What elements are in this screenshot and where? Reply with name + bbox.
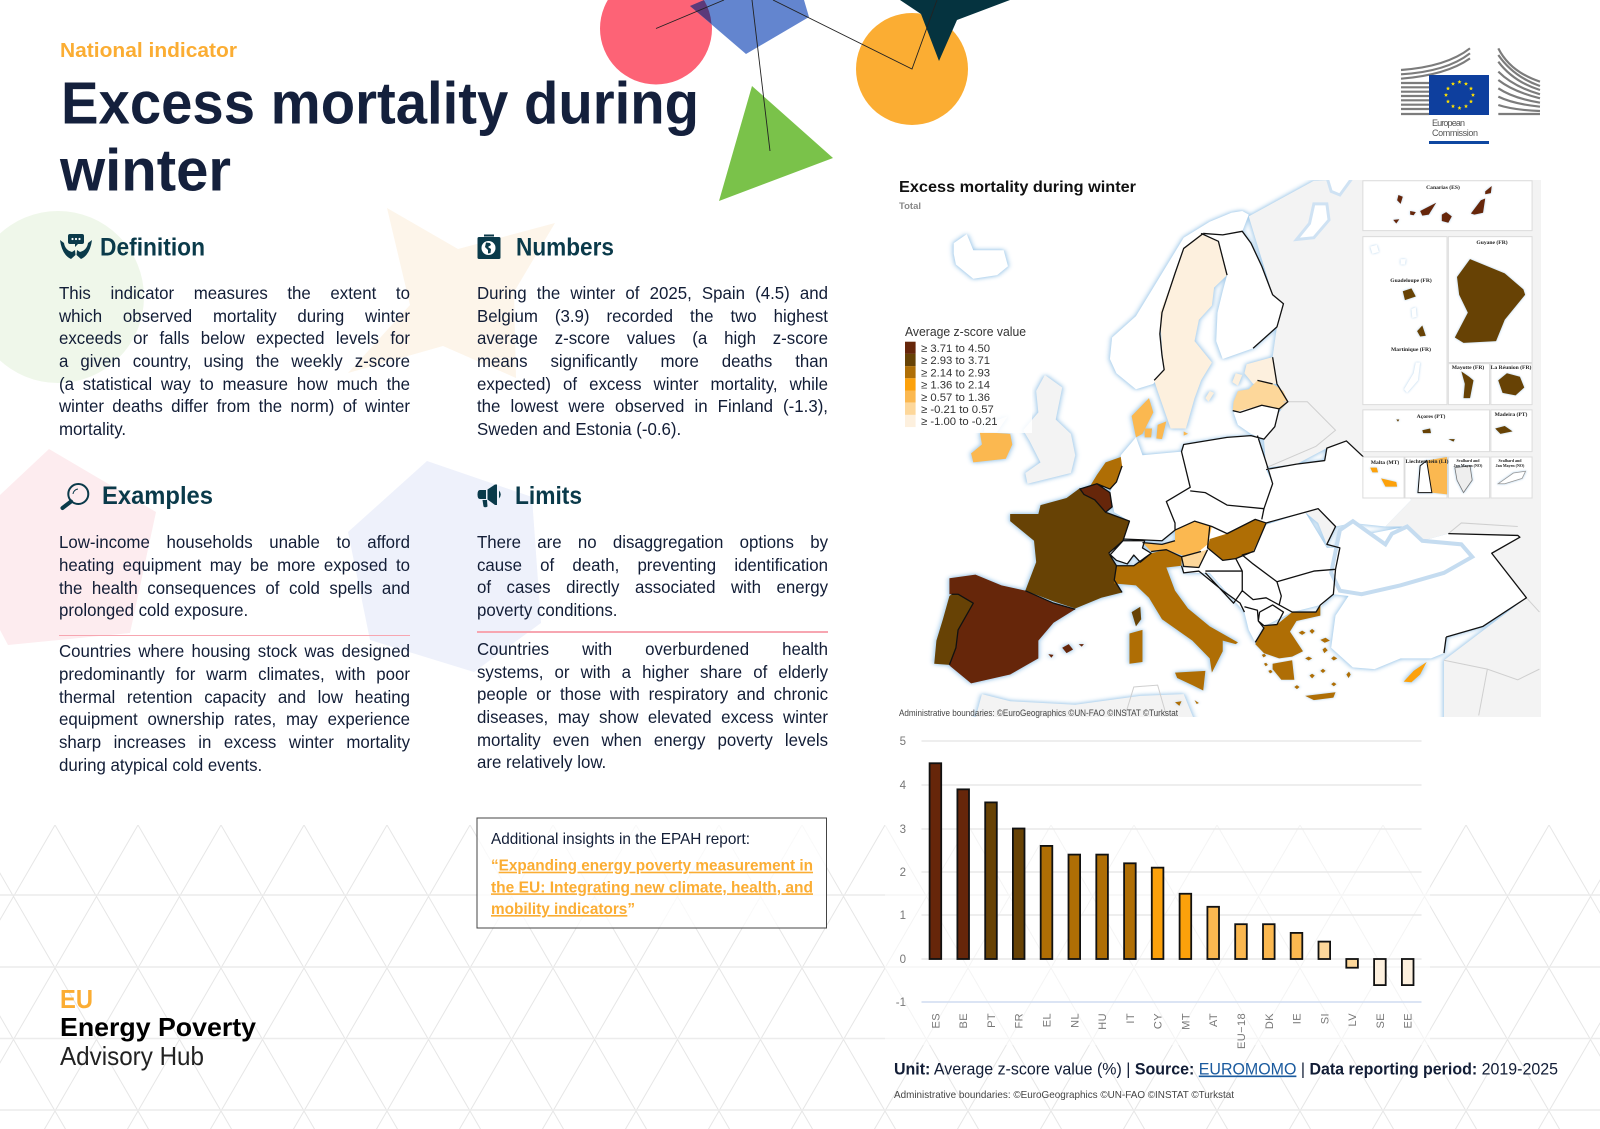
source line: Unit: Average z-score value (%) | Source: EUROMOMO | Data reporting period: 2019-2025 (894, 1060, 1558, 1078)
bar chart: average z-score by country: 1 (900, 910, 906, 922)
text: limits first paragraph: poverty conditions. (476, 600, 617, 620)
callout: additional insights box: mobility indicators” (491, 901, 635, 918)
bar chart: average z-score by country: SE (1375, 1013, 1387, 1028)
footer logo: EU Energy Poverty Advisory Hub: Advisory Hub (60, 1041, 204, 1071)
map legend: ≥ -1.00 to -0.21 (921, 416, 998, 428)
icon: magnifying glass (60, 483, 90, 510)
inset labels: Jan Mayen (NO) (1454, 463, 1483, 468)
bar chart: average z-score by country: HU (1097, 1013, 1109, 1030)
panel: numbers (476, 234, 828, 439)
text: examples second paragraph: during atypical cold events. (59, 755, 262, 775)
text: numbers body: average z-score values (a high z-score (476, 328, 828, 348)
inset labels: Guadeloupe (FR) (1390, 277, 1432, 284)
bar chart: average z-score by country: EU−18 (1236, 1013, 1248, 1049)
inset labels: Mayotte (FR) (1452, 364, 1484, 371)
text: limits second paragraph: people or those with respiratory and chronic (476, 684, 828, 704)
text: limits second paragraph: are relatively low. (476, 752, 606, 772)
text: examples first paragraph: the health consequences of cold spells and (59, 578, 410, 598)
inset labels: Malta (MT) (1371, 459, 1399, 466)
map legend: ≥ 1.36 to 2.14 (921, 380, 990, 392)
text: definition body: which observed mortality during winter (59, 306, 410, 326)
bar chart: average z-score by country: ES (930, 1013, 942, 1028)
text: definition body: mortality. (59, 419, 126, 439)
panel: definition (59, 234, 410, 439)
footer logo: EU Energy Poverty Advisory Hub (60, 986, 257, 1071)
map legend: Average z-score value (905, 324, 1026, 339)
inset labels: Martinique (FR) (1391, 346, 1431, 353)
text: examples second paragraph: thermal retention capacity and low heating (59, 687, 410, 707)
inset labels: Madeira (PT) (1495, 411, 1528, 418)
bar chart: average z-score by country: IT (1125, 1013, 1137, 1024)
title: Excess mortality during (61, 70, 699, 136)
White Sea (1296, 177, 1353, 240)
title (59, 70, 699, 204)
text: limits first paragraph: There are no disaggregation options by (476, 532, 828, 552)
inset labels: Jan Mayen (NO) (1496, 463, 1525, 468)
map legend: ≥ -0.21 to 0.57 (921, 404, 994, 416)
bar chart: average z-score by country: EL (1042, 1013, 1054, 1027)
text: limits first paragraph: of cases directly associated with energy (476, 577, 828, 597)
panel: examples (59, 482, 410, 775)
callout: additional insights box: “Expanding energy poverty measurement in (491, 858, 813, 875)
label: National indicator: National indicator (60, 39, 237, 62)
text: limits first paragraph (476, 532, 828, 620)
text: examples second paragraph (59, 641, 410, 775)
icon: hands holding speech bubble (60, 234, 92, 259)
text: limits second paragraph: diseases, may show elevated excess winter (476, 707, 828, 727)
bar chart: average z-score by country: CY (1153, 1013, 1165, 1029)
bar chart: average z-score by country: DK (1264, 1013, 1276, 1029)
map legend (900, 324, 1032, 433)
text: limits second paragraph: Countries with overburdened health (476, 639, 828, 659)
map title: Excess mortality during winter (899, 179, 1136, 196)
text: definition body (59, 283, 410, 439)
text: limits first paragraph: cause of death, preventing identification (476, 555, 828, 575)
callout: additional insights box (477, 818, 826, 928)
text: definition body: This indicator measures the extent to (59, 283, 410, 303)
bar chart: average z-score by country: 5 (900, 736, 906, 748)
text: numbers body: expected) of excess winter mortality, while (476, 374, 828, 394)
map legend: ≥ 2.93 to 3.71 (921, 355, 990, 367)
inset labels: Açores (PT) (1417, 413, 1445, 420)
callout: additional insights box: the EU: Integrating new climate, health, and (491, 879, 813, 896)
icon: clipboard with globe (478, 234, 500, 259)
borders (949, 231, 1526, 665)
bar chart: average z-score by country: -1 (896, 997, 906, 1009)
Greece (1175, 605, 1351, 706)
icon: megaphone (478, 484, 501, 508)
bar chart: average z-score by country: NL (1069, 1013, 1081, 1028)
bar chart: average z-score by country: EE (1403, 1013, 1415, 1028)
text: numbers body: Sweden and Estonia (-0.6). (476, 419, 681, 439)
bar chart: average z-score by country (896, 736, 1422, 1049)
bar chart: average z-score by country: FR (1014, 1013, 1026, 1028)
text: examples second paragraph: sharp increases in excess winter mortality (59, 732, 410, 752)
text: examples first paragraph: heating equipment may be more exposed to (59, 555, 410, 575)
text: examples first paragraph: prolonged cold exposure. (59, 600, 248, 620)
bar chart: average z-score by country: 4 (900, 780, 907, 792)
text: definition body: exceeds or falls below expected levels for (59, 328, 410, 348)
text: definition body: winter deaths differ from the norm) of winter (59, 396, 410, 416)
text: numbers body: means significantly more deaths than (476, 351, 828, 371)
text: numbers body (476, 283, 828, 439)
Black Sea (1331, 521, 1472, 594)
inset territories (1370, 186, 1526, 494)
callout: additional insights box: Additional insights in the EPAH report: (491, 831, 750, 848)
inset labels (1371, 184, 1531, 468)
text: numbers body: During the winter of 2025, Spain (4.5) and (476, 283, 828, 303)
bar chart: average z-score by country: PT (986, 1013, 998, 1028)
text: examples second paragraph: Countries where housing stock was designed (59, 641, 410, 661)
title: winter (59, 138, 231, 204)
background triangle pattern (0, 735, 1600, 1129)
bar chart: average z-score by country: 3 (900, 824, 906, 836)
logo: European Commission (1401, 48, 1540, 144)
inset labels: Svalbard and (1456, 458, 1480, 463)
map legend: ≥ 3.71 to 4.50 (921, 343, 990, 355)
text: examples first paragraph: Low-income households unable to afford (59, 532, 410, 552)
inset labels: La Réunion (FR) (1491, 364, 1531, 371)
inset frames (1363, 181, 1532, 498)
decorative geometric shapes (600, 0, 1010, 201)
bar chart: average z-score by country: 0 (900, 954, 906, 966)
footer logo: EU Energy Poverty Advisory Hub: EU (60, 986, 93, 1014)
footer logo: EU Energy Poverty Advisory Hub: Energy Poverty (60, 1012, 257, 1042)
map: excess mortality by country (893, 170, 1557, 726)
pastel background shapes (0, 208, 555, 672)
panel: limits (476, 482, 828, 772)
text: numbers body: the lowest were observed in Finland (-1.3), (476, 396, 828, 416)
map legend: ≥ 2.14 to 2.93 (921, 367, 990, 379)
map title: Total (899, 201, 921, 212)
heading: Examples: Examples (102, 482, 213, 510)
gray borders of non-EU land (1125, 402, 1539, 715)
text: numbers body: Belgium (3.9) recorded the two highest (476, 306, 828, 326)
map attribution: Administrative boundaries: ©EuroGeographics ©UN-FAO ©INSTAT ©Turkstat (899, 708, 1178, 719)
text: limits second paragraph: mortality even when energy poverty levels (476, 730, 828, 750)
text: limits second paragraph (476, 639, 828, 772)
text: definition body: (a statistical way to measure how much the (59, 374, 410, 394)
text: examples second paragraph: equipment ownership rates, may experience (59, 709, 410, 729)
text: examples first paragraph (59, 532, 410, 620)
land masses with coastal glow (934, 170, 1557, 726)
inset labels: Guyane (FR) (1476, 239, 1508, 246)
bar chart: average z-score by country: SI (1319, 1013, 1331, 1024)
logo: European Commission: Commission (1432, 128, 1478, 138)
administrative boundaries note: Administrative boundaries: ©EuroGeographics ©UN-FAO ©INSTAT ©Turkstat (894, 1089, 1234, 1101)
map legend: ≥ 0.57 to 1.36 (921, 392, 990, 404)
inset labels: Liechtenstein (LI) (1405, 458, 1449, 465)
bar chart: average z-score by country: 2 (900, 867, 906, 879)
bar chart: average z-score by country: BE (958, 1013, 970, 1028)
text: examples second paragraph: predominantly for warm climates, with poor (59, 664, 410, 684)
heading: Limits: Limits (515, 482, 582, 510)
inset labels: Canarias (ES) (1426, 184, 1460, 191)
bar chart: average z-score by country: LV (1347, 1013, 1359, 1026)
inset labels: Svalbard and (1498, 458, 1522, 463)
map title (893, 178, 1153, 212)
logo: European Commission: European (1432, 118, 1465, 128)
text: limits second paragraph: systems, or with a higher share of elderly (476, 662, 828, 682)
bar chart: average z-score by country: AT (1208, 1013, 1220, 1027)
bar chart: average z-score by country: IE (1292, 1013, 1304, 1024)
text: definition body: a given country, using the weekly z-score (59, 351, 410, 371)
bar chart: average z-score by country: MT (1180, 1013, 1192, 1030)
